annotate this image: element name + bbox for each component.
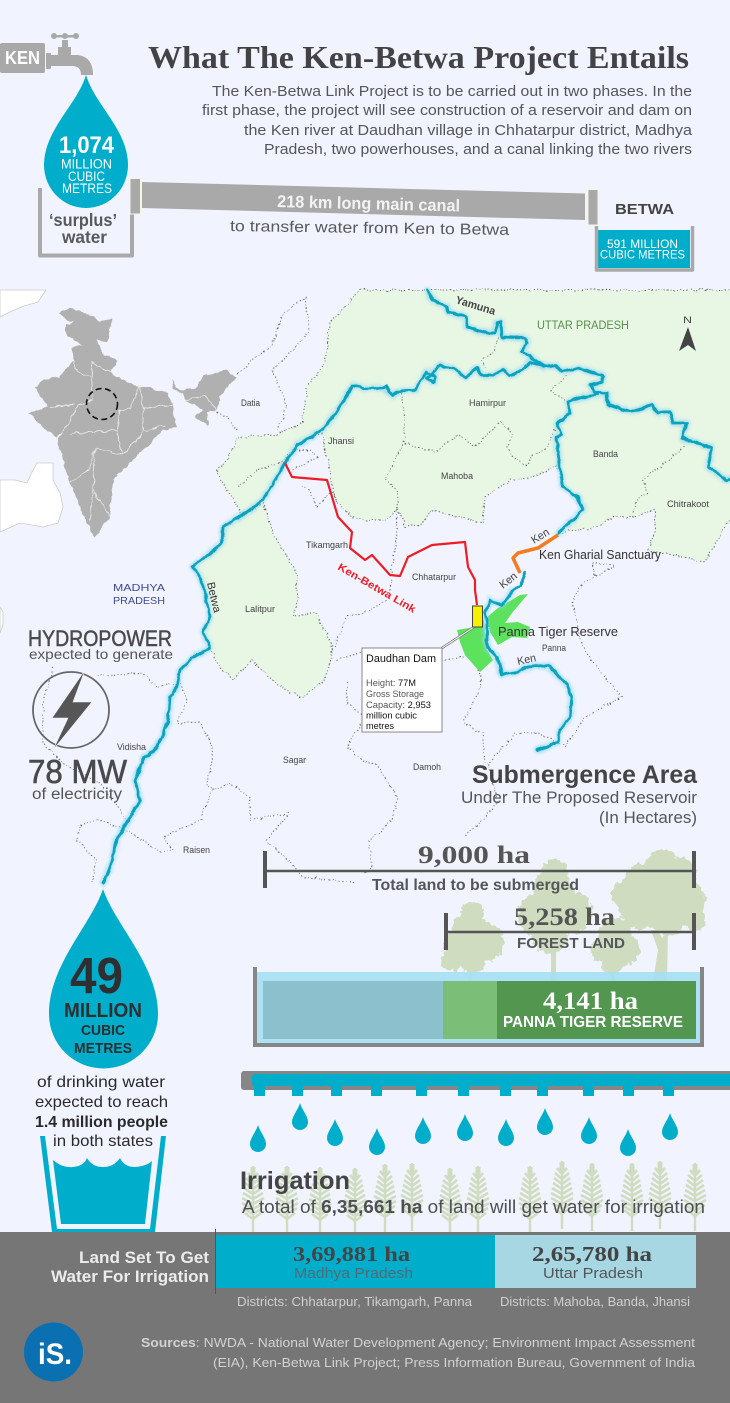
irrigation total text: A total of 6,35,661 ha of land will get water for irrigation	[242, 1197, 705, 1217]
drop figure: 49 million cubic metres: METRES	[74, 1040, 132, 1057]
icon: ken tap	[0, 33, 93, 75]
illustration: forest trees	[441, 850, 706, 981]
bar: Madhya Pradesh share: 3,69,881 ha	[293, 1242, 411, 1266]
map labels: Panna	[542, 643, 566, 653]
scale: forest land: FOREST LAND	[517, 935, 625, 952]
text: drinking water reach: of drinking water	[37, 1074, 166, 1091]
map	[0, 290, 730, 883]
subheading: (In Hectares)	[599, 808, 697, 827]
district borders	[43, 297, 685, 883]
icon: locator circle	[86, 388, 118, 420]
map labels: Sagar	[283, 755, 306, 765]
text: drinking water reach	[35, 1074, 168, 1150]
drop figure: 49 million cubic metres	[64, 947, 142, 1057]
text: drinking water reach: in both states	[53, 1133, 153, 1150]
map labels: Jhansi	[328, 436, 354, 446]
scale: forest land	[446, 904, 694, 952]
districts: Madhya Pradesh: Districts: Chhatarpur, Tikamgarh, Panna	[237, 1295, 472, 1309]
map labels: Banda	[593, 449, 618, 459]
callout: Daudhan Dam: Capacity: 2,953	[366, 700, 431, 710]
caption: of electricity	[32, 786, 122, 803]
park: Panna Tiger Reserve	[457, 594, 530, 672]
map labels: Damoh	[413, 762, 441, 772]
map labels	[113, 294, 709, 855]
drop figure: 1,074 million cubic metres	[59, 132, 115, 196]
panel: submergence area	[255, 761, 706, 1045]
icon: irrigation pipe	[241, 1071, 730, 1096]
map labels: Ken Gharial Sanctuary	[539, 548, 662, 562]
scale: total land: Total land to be submerged	[372, 877, 579, 894]
icon: lightning	[33, 670, 109, 750]
sources: Sources : NWDA - National Water Development Agency; Environment Impact Assessment	[141, 1335, 695, 1350]
rivers: Yamuna, Betwa and Ken	[103, 290, 730, 883]
panel: footer	[0, 1229, 730, 1403]
subheading	[461, 788, 697, 827]
label: land set for irrigation: Land Set To Get	[79, 1248, 209, 1267]
text: drinking water reach: expected to reach	[35, 1094, 168, 1111]
map labels: Ken	[497, 570, 520, 591]
drop figure: 1,074 million cubic metres: 1,074	[59, 132, 115, 159]
title: What The Ken-Betwa Project Entails	[148, 39, 689, 75]
icon: ken tap: KEN	[5, 48, 40, 68]
label: land set for irrigation	[51, 1248, 209, 1286]
logo: iS.	[38, 1338, 72, 1371]
betwa tank: 591 MILLION	[607, 239, 678, 251]
intro text: The Ken-Betwa Link Project is to be carried out in two phases. In the	[212, 84, 692, 100]
river: Ken Gharial Sanctuary stretch	[513, 535, 558, 573]
drop figure: 49 million cubic metres: 49	[70, 947, 123, 1004]
callout: Daudhan Dam: Daudhan Dam	[366, 653, 436, 665]
label: surplus water	[49, 210, 117, 247]
icon: big water drop	[49, 889, 158, 1068]
map labels: Chitrakoot	[667, 499, 709, 509]
scale: total land	[265, 842, 694, 894]
label: Betwa: BETWA	[615, 201, 674, 218]
districts: Uttar Pradesh: Districts: Mahoba, Banda, Jhansi	[500, 1295, 690, 1309]
drop figure: 49 million cubic metres: MILLION	[64, 1000, 142, 1022]
scale: forest land: 5,258 ha	[514, 904, 616, 931]
map: India locator	[28, 307, 238, 538]
map labels: Mahoba	[441, 471, 473, 481]
bar: Madhya Pradesh share	[216, 1235, 495, 1288]
illustration: wheat field	[242, 1161, 706, 1236]
scale: total land: 9,000 ha	[418, 842, 531, 869]
panel: irrigation	[240, 1071, 730, 1236]
map labels: Hamirpur	[469, 398, 506, 408]
state: Uttar Pradesh	[217, 290, 730, 562]
betwa tank	[596, 226, 692, 270]
bar: Uttar Pradesh share: Uttar Pradesh	[543, 1265, 643, 1282]
bar: Madhya Pradesh share: Madhya Pradesh	[294, 1265, 413, 1282]
sources	[141, 1335, 696, 1370]
icon: water glass	[40, 1136, 166, 1232]
subheading: expected to generate	[29, 646, 173, 662]
reservoir tank	[255, 967, 702, 1045]
drop figure: 49 million cubic metres: CUBIC	[81, 1022, 125, 1039]
icon: falling water drops	[250, 1103, 678, 1156]
intro text: first phase, the project will see construction of a reservoir and dam on	[202, 103, 692, 119]
heading: Submergence Area	[472, 761, 698, 789]
intro text: Pradesh, two powerhouses, and a canal linking the two rivers	[264, 142, 692, 158]
map labels: MADHYA	[113, 582, 165, 594]
bar: Uttar Pradesh share: 2,65,780 ha	[532, 1242, 653, 1266]
map labels: Ken	[516, 652, 537, 668]
canal label: 218 km long main canal	[277, 192, 460, 215]
map labels: Betwa	[204, 581, 223, 615]
map labels: PRADESH	[113, 595, 165, 607]
icon: surplus water tank	[40, 188, 132, 256]
map labels: Datia	[241, 398, 260, 408]
figure: 78 MW: 78 MW	[28, 753, 128, 790]
canal sublabel: to transfer water from Ken to Betwa	[230, 218, 510, 239]
callout: Daudhan Dam: Gross Storage	[366, 689, 424, 699]
drop figure: 1,074 million cubic metres: CUBIC	[68, 169, 105, 184]
panel: drinking water	[35, 889, 168, 1232]
heading: HYDROPOWER	[28, 626, 172, 651]
bar: Uttar Pradesh share	[495, 1235, 696, 1288]
map labels: Raisen	[183, 845, 210, 855]
map labels: Lalitpur	[245, 604, 275, 614]
reservoir tank: 4,141 ha	[543, 988, 639, 1015]
river glow	[103, 290, 730, 883]
map labels: Ken-Betwa Link	[336, 561, 418, 616]
map labels: Chhatarpur	[412, 572, 456, 582]
label: land set for irrigation: Water For Irrigation	[51, 1267, 209, 1286]
panel: hydropower	[28, 626, 173, 803]
icon: large water drop	[44, 75, 128, 208]
callout: Daudhan Dam: Height: 77M	[366, 678, 416, 688]
drop figure: 1,074 million cubic metres: METRES	[62, 181, 112, 196]
icon: north arrow	[679, 315, 696, 351]
neighbouring countries	[0, 290, 63, 633]
callout: Daudhan Dam	[362, 627, 474, 732]
callout: Daudhan Dam: million cubic	[366, 710, 418, 720]
callout: Daudhan Dam: metres	[366, 721, 394, 731]
drop figure: 1,074 million cubic metres: MILLION	[61, 156, 112, 172]
icon: dam marker	[472, 606, 482, 627]
map labels: Yamuna	[454, 294, 498, 318]
map labels: Panna Tiger Reserve	[498, 625, 618, 639]
label: surplus water: ‘surplus’	[49, 210, 117, 230]
label: surplus water: water	[61, 227, 107, 247]
map labels: Tikamgarh	[306, 540, 348, 550]
intro text	[202, 84, 693, 158]
reservoir tank: PANNA TIGER RESERVE	[503, 1014, 683, 1031]
canal: Ken-Betwa Link	[285, 463, 477, 605]
map labels: Vidisha	[117, 742, 146, 752]
map labels: Ken	[529, 526, 552, 547]
betwa tank: CUBIC METRES	[600, 250, 685, 262]
intro text: the Ken river at Daudhan village in Chhatarpur district, Madhya	[244, 123, 693, 139]
district: Lalitpur	[193, 503, 333, 698]
icon: north arrow: N	[683, 315, 692, 326]
panel: project header	[0, 33, 693, 270]
subheading: Under The Proposed Reservoir	[461, 788, 697, 807]
canal pipe	[130, 178, 598, 225]
map labels: UTTAR PRADESH	[537, 320, 629, 332]
text: drinking water reach: 1.4 million people	[35, 1114, 168, 1131]
sources: (EIA), Ken-Betwa Link Project; Press Information Bureau, Government of India	[213, 1355, 696, 1370]
heading: Irrigation	[240, 1167, 350, 1195]
logo	[24, 1322, 83, 1382]
